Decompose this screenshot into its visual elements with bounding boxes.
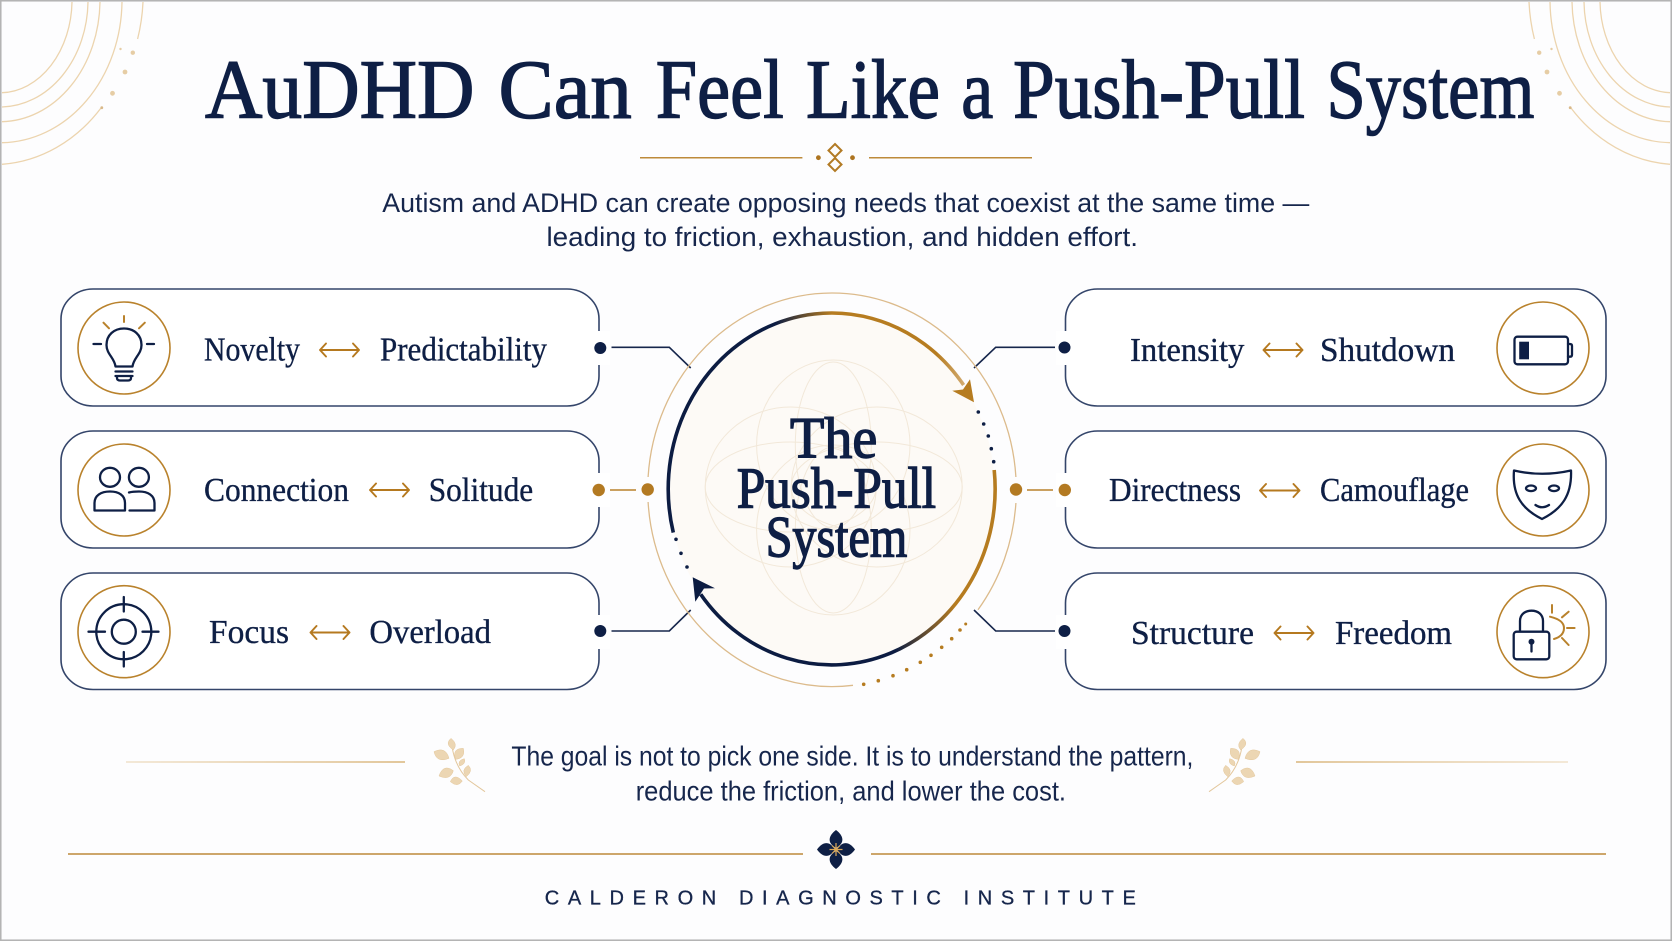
arrow: push arc navy to gold — [668, 313, 974, 533]
subtitle: Autism and ADHD can create opposing needs that coexist at the same time — — [382, 188, 1310, 218]
panel: Directness and Camouflage — [1066, 431, 1606, 548]
title: System — [1326, 44, 1534, 136]
title: Feel — [656, 44, 784, 136]
title divider ornament — [640, 144, 1032, 171]
panel: Intensity and Shutdown — [1066, 289, 1606, 406]
flower pattern — [705, 360, 962, 615]
outer gold ring — [648, 293, 1016, 687]
arrow: two-way — [1274, 626, 1314, 640]
panel: Focus and Overload — [61, 573, 599, 690]
icon: right laurel sprig — [1209, 738, 1260, 792]
panel: Novelty and Predictability: Predictability — [380, 332, 547, 368]
subtitle: leading to friction, exhaustion, and hidden effort. — [546, 222, 1138, 252]
title: Push-Pull — [1013, 44, 1305, 136]
panel: Focus and Overload: Focus — [209, 614, 289, 651]
panel: Novelty and Predictability: Novelty — [204, 332, 300, 368]
center title — [737, 406, 936, 570]
title — [205, 44, 1534, 136]
left fading rule — [126, 761, 405, 763]
center title: The — [790, 406, 877, 470]
icon: low battery — [1497, 302, 1589, 394]
panel: Structure and Freedom — [1066, 573, 1606, 690]
decoration: top left arcs — [2, 2, 143, 164]
center title: Push-Pull — [737, 456, 936, 520]
icon: two people — [78, 444, 170, 536]
title: Can — [498, 44, 632, 136]
icon: padlock and sun — [1497, 586, 1589, 678]
panel: Connection and Solitude: Connection — [204, 472, 349, 509]
arrow: two-way — [1260, 484, 1300, 497]
title: Like — [806, 44, 940, 136]
icon: target — [78, 586, 170, 678]
panel: Focus and Overload: Overload — [369, 614, 491, 651]
panel: Directness and Camouflage: Camouflage — [1320, 472, 1469, 509]
arrow: two-way — [310, 626, 350, 639]
panel: Structure and Freedom: Freedom — [1335, 615, 1452, 652]
closing statement: reduce the friction, and lower the cost. — [636, 776, 1066, 806]
closing statement: The goal is not to pick one side. It is to understand the pattern, — [511, 740, 1193, 772]
footer institute name: CALDERON DIAGNOSTIC INSTITUTE — [545, 887, 1136, 909]
decoration: top right arcs — [1529, 2, 1670, 164]
icon: footer emblem — [817, 830, 855, 869]
closing statement — [511, 740, 1193, 806]
inner cream disc — [669, 314, 995, 664]
panel: Novelty and Predictability — [61, 289, 599, 406]
title: a — [961, 44, 993, 136]
arrow: two-way — [1264, 344, 1302, 356]
panel: Intensity and Shutdown: Shutdown — [1320, 332, 1455, 369]
arrow: pull arc gold to navy — [693, 470, 995, 665]
icon: mask — [1497, 444, 1589, 536]
icon: light bulb — [78, 302, 170, 394]
arrow: two-way — [320, 344, 359, 356]
panel: Directness and Camouflage: Directness — [1109, 472, 1241, 509]
footer divider — [68, 830, 1606, 869]
arrow: two-way — [370, 484, 409, 496]
panel: Connection and Solitude — [61, 431, 599, 548]
panel: Intensity and Shutdown: Intensity — [1130, 332, 1244, 369]
central cycle diagram — [648, 293, 1016, 687]
subtitle — [382, 188, 1310, 252]
panel: Structure and Freedom: Structure — [1131, 615, 1254, 652]
connectors — [590, 331, 1076, 649]
dotted trail navy — [674, 410, 996, 569]
title: AuDHD — [205, 44, 474, 136]
right fading rule — [1296, 761, 1568, 763]
panel: Connection and Solitude: Solitude — [429, 472, 533, 509]
dotted trail gold — [862, 622, 967, 686]
center title: System — [766, 504, 907, 570]
icon: left laurel sprig — [434, 738, 485, 792]
